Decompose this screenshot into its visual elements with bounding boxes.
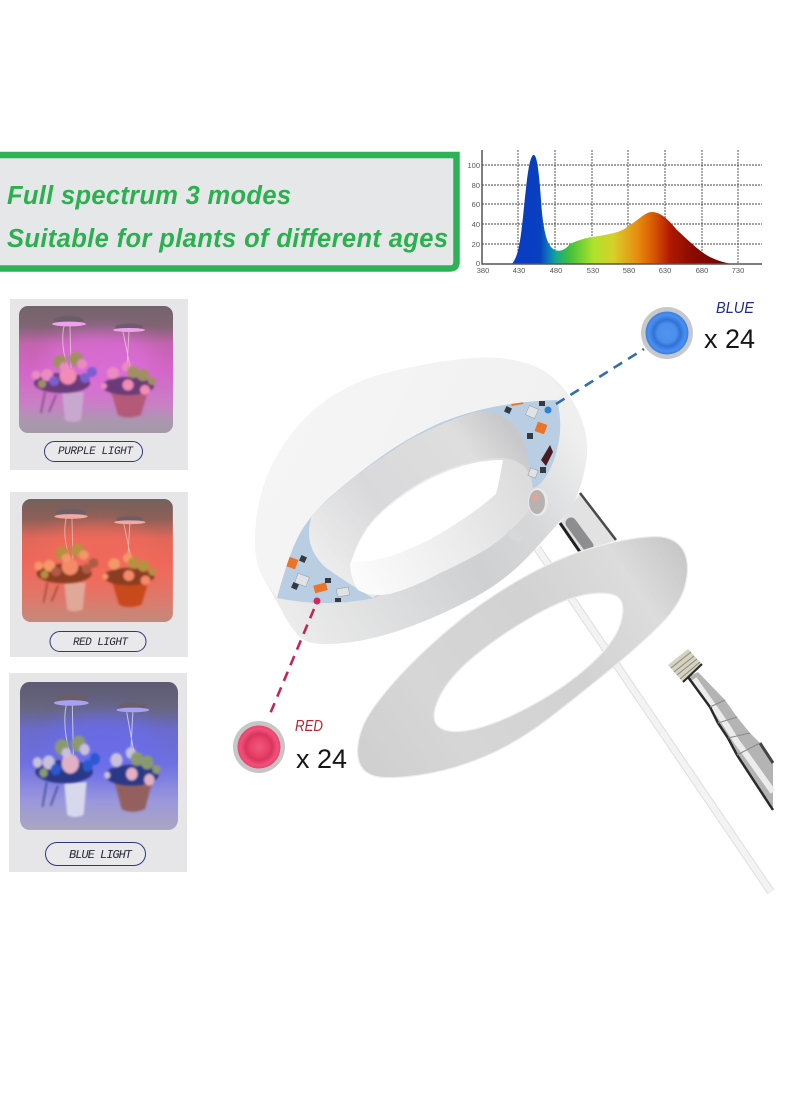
photo: purple light plants (19, 306, 173, 433)
ring opening (352, 460, 503, 562)
label pill: blue light: BLUE LIGHT (69, 848, 133, 862)
label pill: purple light: PURPLE LIGHT (58, 446, 134, 458)
callout: blue LED leader line (544, 349, 644, 414)
label pill: blue light (46, 842, 146, 866)
x axis labels: 730 (732, 266, 744, 275)
ring lamp head (255, 358, 587, 644)
LED circuit board (277, 400, 560, 603)
icon: red LED (233, 721, 285, 773)
y axis labels: 20 (472, 240, 480, 249)
photo: red light plants (22, 499, 173, 622)
x axis labels: 430 (513, 266, 525, 275)
x axis labels: 380 (477, 266, 489, 275)
x axis labels (477, 266, 744, 275)
y axis labels: 0 (476, 259, 480, 268)
y axis labels: 100 (467, 161, 480, 170)
icon: blue LED (641, 307, 693, 359)
x axis labels: 580 (623, 266, 635, 275)
x axis labels: 630 (659, 266, 671, 275)
callout: red LED leader line (270, 598, 320, 714)
count: blue x 24: x 24 (704, 324, 755, 354)
x axis labels: 680 (696, 266, 708, 275)
y axis labels: 80 (472, 181, 480, 190)
panel: blue light (9, 673, 187, 872)
spectrum chart (467, 150, 762, 275)
heading: suitable for plants: Suitable for plants of different ages (7, 225, 448, 253)
small clip notch (506, 526, 524, 544)
inner cylinder wall (309, 412, 531, 598)
ring outer top wall (255, 358, 562, 598)
telescopic metal rod (668, 649, 773, 810)
screw hole (528, 488, 548, 516)
y axis labels: 40 (472, 220, 480, 229)
spectrum curve (512, 155, 732, 264)
panel: red light (10, 492, 188, 657)
count: red x 24: x 24 (296, 744, 347, 774)
label: blue: BLUE (716, 300, 755, 317)
photo: blue light plants (20, 682, 178, 830)
lower diffuser plate (358, 537, 688, 778)
near inner wall (350, 458, 533, 595)
white power cable (537, 548, 771, 892)
heading: full spectrum: Full spectrum 3 modes (7, 182, 291, 210)
LED chips (286, 397, 553, 602)
y axis labels: 60 (472, 200, 480, 209)
label pill: purple light (44, 442, 142, 462)
panel: purple light (10, 299, 188, 470)
threaded screw tip (668, 649, 702, 682)
label pill: red light: RED LIGHT (73, 637, 129, 649)
x axis labels: 530 (587, 266, 599, 275)
x axis labels: 480 (550, 266, 562, 275)
label pill: red light (50, 632, 146, 652)
chrome tube behind rings (560, 493, 616, 553)
y axis labels (467, 161, 480, 268)
label: red: RED (295, 718, 323, 735)
banner: full spectrum 3 modes (0, 155, 456, 268)
